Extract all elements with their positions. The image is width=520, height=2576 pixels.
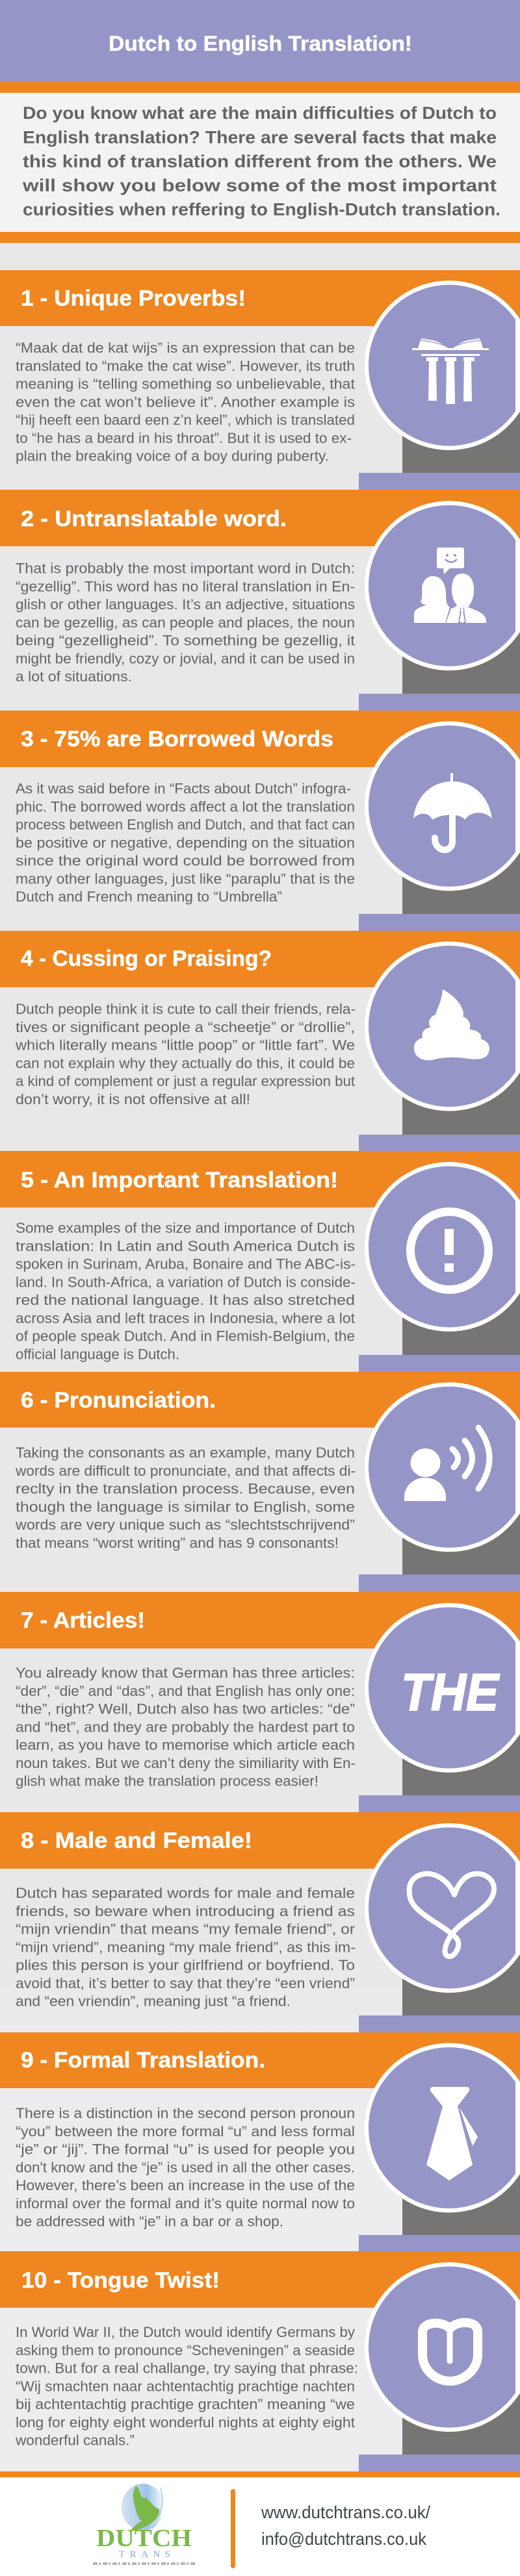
- body text 7: You already know that German has three articles:: [16, 1665, 355, 1681]
- pedestal 6: [359, 1507, 520, 1592]
- body text 4: can not explain why they actually do this, it could be: [16, 1055, 355, 1071]
- panel: 6 pronunciation: [0, 1372, 520, 1592]
- contact details: info@dutchtrans.co.uk: [261, 2529, 426, 2549]
- body text 9: be addressed with “je” in a bar or a shop.: [16, 2214, 283, 2229]
- panel: 10 tongue twist: [0, 2251, 520, 2471]
- heading band 5: [0, 1151, 520, 1207]
- body text 1: plain the breaking voice of a boy during puberty.: [16, 448, 329, 464]
- badge 1: [365, 281, 520, 450]
- body text 4: tives or significant people a “scheetje” or “drollie”,: [16, 1019, 355, 1035]
- body text 9: “je” or “jij”. The formal “u” is used for people you: [16, 2141, 355, 2158]
- heading 2: 2 - Untranslatable word.: [21, 507, 287, 531]
- body text 1: translated to “make the cat wise”. However, its truth: [16, 358, 355, 374]
- body text 10: long for eighty eight wonderful nights at eighty eight: [16, 2414, 355, 2431]
- body text 8: avoid that, it’s better to say that they’re “een vriend”: [16, 1975, 355, 1991]
- body text 1: to “he has a beard in his throat”. But it is used to ex-: [16, 430, 352, 446]
- intro text: this kind of translation different from the others. We: [23, 152, 497, 171]
- panel: 7 articles: [0, 1592, 520, 1812]
- body text 9: [16, 2105, 355, 2229]
- body text 8: “mijn vriend”, meaning “my male friend”, as this im-: [16, 1939, 356, 1955]
- body text 2: a lot of situations.: [16, 668, 132, 685]
- logo: Dutch Trans: TRANS: [119, 2549, 170, 2560]
- panel: 3 borrowed words: [0, 711, 520, 931]
- body text 7: and “het”, and they are probably the hardest part to: [16, 1719, 355, 1735]
- body text 5: of people speak Dutch. And in Flemish-Belgium, the: [16, 1328, 355, 1345]
- body text 6: that means “worst writing” and has 9 consonants!: [16, 1535, 339, 1551]
- body text 4: [15, 1001, 356, 1107]
- body text 9: informal over the formal and it’s quite normal now to: [16, 2195, 355, 2212]
- body text 10: bij achtentachtig prachtige grachten” meaning “we: [16, 2396, 355, 2412]
- heading band 2: [0, 490, 520, 546]
- icon: open book on columns: [412, 338, 489, 404]
- icon: exclamation in ring: [411, 1212, 489, 1290]
- heading band 10: [0, 2251, 520, 2308]
- heading 3: 3 - 75% are Borrowed Words: [21, 727, 333, 751]
- badge 9: [365, 2043, 520, 2212]
- icon: tongue: [422, 2323, 478, 2381]
- heading band 7: [0, 1592, 520, 1648]
- intro text: [22, 103, 500, 220]
- body text 5: [16, 1220, 356, 1362]
- body text 8: plies this person is your girlfriend or boyfriend. To: [16, 1957, 355, 1973]
- intro text: curiosities when reffering to English-Dutch translation.: [23, 200, 500, 220]
- body text 10: town. But for a real challange, try saying that phrase:: [16, 2360, 358, 2376]
- contact details: [261, 2503, 430, 2549]
- body text 3: since the original word could be borrowed from: [16, 853, 355, 869]
- heading 7: 7 - Articles!: [21, 1608, 145, 1633]
- body text 8: Dutch has separated words for male and female: [16, 1885, 355, 1901]
- panel: 5 an important translation: [0, 1151, 520, 1372]
- pedestal 1: [359, 403, 520, 490]
- panel: 1 unique proverbs: [0, 270, 520, 490]
- body text 9: don't know and the “je” is used in all the other cases.: [16, 2159, 355, 2175]
- body text 3: [16, 781, 355, 905]
- badge 2: [365, 501, 520, 670]
- body text 6: [15, 1445, 356, 1551]
- body text 2: can be gezellig, as can people and places, the noun: [16, 614, 355, 631]
- panel: 9 formal translation: [0, 2032, 520, 2251]
- body text 5: red the national language. It has also stretched: [16, 1292, 355, 1308]
- body text 3: process between English and Dutch, and that fact can: [16, 816, 355, 833]
- badge 5: [365, 1162, 520, 1332]
- panel: 4 cussing or praising: [0, 931, 520, 1151]
- heading band 1: [0, 270, 520, 326]
- body text 5: spoken in Surinam, Aruba, Bonaire and The ABC-is-: [16, 1256, 356, 1272]
- body text 9: However, there’s been an increase in the use of the: [16, 2177, 355, 2193]
- body text 6: reclty in the translation process. Because, even: [16, 1481, 355, 1496]
- body text 2: “gezellig”. This word has no literal translation in En-: [16, 578, 355, 595]
- body text 6: words are very unique such as “slechtstschrijvend”: [15, 1517, 355, 1533]
- title: Dutch to English Translation!: [109, 32, 412, 55]
- heading 1: 1 - Unique Proverbs!: [21, 286, 246, 310]
- body text 10: wonderful canals.”: [15, 2432, 135, 2449]
- body text 7: “der”, “die” and “das”, and that English has only one:: [16, 1683, 355, 1699]
- divider bar: [231, 2489, 235, 2568]
- badge 3: [365, 721, 520, 891]
- logo: Dutch Trans: [93, 2484, 195, 2564]
- body text 2: That is probably the most important word in Dutch:: [16, 561, 355, 577]
- heading 8: 8 - Male and Female!: [21, 1828, 252, 1853]
- pedestal 10: [359, 2390, 520, 2471]
- body text 10: [15, 2324, 358, 2449]
- icon: poop: [414, 989, 489, 1060]
- body text 4: Dutch people think it is cute to call their friends, rela-: [16, 1001, 356, 1017]
- body text 5: official language is Dutch.: [16, 1346, 179, 1362]
- pedestal 8: [359, 1949, 520, 2032]
- body text 6: though the language is similar to English, some: [16, 1498, 355, 1515]
- body text 8: “mijn vriendin” that means “my female friend”, or: [16, 1921, 355, 1937]
- header banner: [0, 0, 520, 82]
- body text 1: meaning is “telling something so unbelievable, that: [16, 375, 355, 392]
- badge 7: [365, 1603, 520, 1773]
- icon: THE: THE: [401, 1663, 500, 1722]
- badge 10: [365, 2262, 520, 2432]
- body text 1: [16, 340, 355, 464]
- body text 9: There is a distinction in the second person pronoun: [16, 2105, 355, 2121]
- body text 3: Dutch and French meaning to “Umbrella”: [16, 889, 282, 905]
- body text 6: words are difficult to pronunciate, and that affects di-: [15, 1463, 356, 1479]
- body text 3: be positive or negative, depending on the situation: [16, 835, 355, 851]
- body text 4: which literally means “little poop” or “little fart”. We: [15, 1037, 355, 1054]
- pedestal 4: [359, 1065, 520, 1151]
- contact details: www.dutchtrans.co.uk/: [261, 2503, 430, 2522]
- icon: heart ribbon: [410, 1874, 494, 1956]
- body text 2: being “gezelligheid”. To something be gezellig, it: [16, 633, 355, 649]
- body text 1: “hij heeft een baard een z’n keel”, which is translated: [16, 412, 355, 428]
- body text 8: and “een vriendin”, meaning just “a friend.: [16, 1993, 291, 2010]
- panel: 2 untranslatable word: [0, 490, 520, 711]
- body text 7: [16, 1665, 356, 1789]
- body text 1: “Maak dat de kat wijs” is an expression that can be: [16, 340, 355, 356]
- heading 6: 6 - Pronunciation.: [21, 1388, 216, 1413]
- icon: speaking person: [404, 1428, 489, 1501]
- pedestal 2: [359, 624, 520, 711]
- body text 10: “Wij smachten naar achtentachtig prachtige nachten: [16, 2378, 355, 2394]
- badge 4: [365, 942, 520, 1111]
- body text 7: glish what make the translation process easier!: [16, 1773, 318, 1789]
- icon: necktie: [426, 2087, 478, 2180]
- pedestal 7: [359, 1728, 520, 1812]
- intro text: English translation? There are several facts that make: [23, 127, 497, 147]
- badge 6: [365, 1382, 520, 1552]
- body text 9: “you” between the more formal “u” and less formal: [16, 2123, 355, 2140]
- pedestal 5: [359, 1286, 520, 1372]
- body text 3: As it was said before in “Facts about Dutch” infogra-: [16, 781, 351, 797]
- heading band 9: [0, 2032, 520, 2088]
- body text 7: noun takes. But we can’t deny the similiarity with En-: [16, 1755, 356, 1771]
- logo: Dutch Trans: DUTCH: [96, 2525, 192, 2552]
- body text 2: might be friendly, cozy or jovial, and it can be used in: [16, 651, 355, 666]
- heading band 4: [0, 931, 520, 987]
- body text 2: [16, 561, 355, 685]
- body text 6: Taking the consonants as an example, many Dutch: [16, 1445, 355, 1461]
- footer: [0, 2471, 520, 2576]
- icon: umbrella: [413, 773, 492, 850]
- heading 9: 9 - Formal Translation.: [21, 2048, 265, 2073]
- heading band 8: [0, 1812, 520, 1869]
- body text 8: [16, 1885, 356, 2010]
- body text 8: friends, so beware when introducing a friend as: [16, 1903, 355, 1919]
- body text 3: phic. The borrowed words affect a lot the translation: [16, 799, 355, 814]
- body text 10: In World War II, the Dutch would identify Germans by: [16, 2324, 355, 2340]
- body text 4: a kind of complement or just a regular expression but: [16, 1073, 355, 1089]
- body text 5: land. In South-Africa, a variation of Dutch is conside-: [16, 1274, 356, 1290]
- intro text: Do you know what are the main difficulties of Dutch to: [23, 103, 497, 123]
- pedestal 9: [359, 2169, 520, 2251]
- body text 5: across Asia and left traces in Indonesia, where a lot: [16, 1310, 355, 1326]
- heading 10: 10 - Tongue Twist!: [21, 2268, 220, 2293]
- icon: couple with speech bubble: [414, 548, 486, 623]
- intro text: will show you below some of the most important: [22, 175, 497, 195]
- heading 4: 4 - Cussing or Praising?: [21, 946, 272, 971]
- heading band 3: [0, 711, 520, 767]
- heading band 6: [0, 1372, 520, 1428]
- heading 5: 5 - An Important Translation!: [21, 1168, 338, 1193]
- panel: 8 male and female: [0, 1812, 520, 2032]
- body text 3: many other languages, just like “paraplu” that is the: [16, 870, 355, 887]
- body text 4: don’t worry, it is not offensive at all!: [16, 1091, 250, 1107]
- body text 10: asking them to pronounce “Scheveningen” a seaside: [16, 2342, 355, 2358]
- pedestal 3: [359, 844, 520, 931]
- body text 7: “the”, right? Well, Dutch also has two articles: “de”: [16, 1700, 355, 1717]
- body text 2: glish or other languages. It’s an adjective, situations: [16, 596, 355, 612]
- intro panel: [0, 82, 520, 243]
- body text 1: even the cat won’t believe it”. Another example is: [16, 394, 355, 410]
- body text 5: translation: In Latin and South America Dutch is: [16, 1238, 355, 1254]
- badge 8: [365, 1823, 520, 1993]
- body text 7: learn, as you have to memorise which article each: [16, 1737, 355, 1753]
- body text 5: Some examples of the size and importance of Dutch: [16, 1220, 355, 1236]
